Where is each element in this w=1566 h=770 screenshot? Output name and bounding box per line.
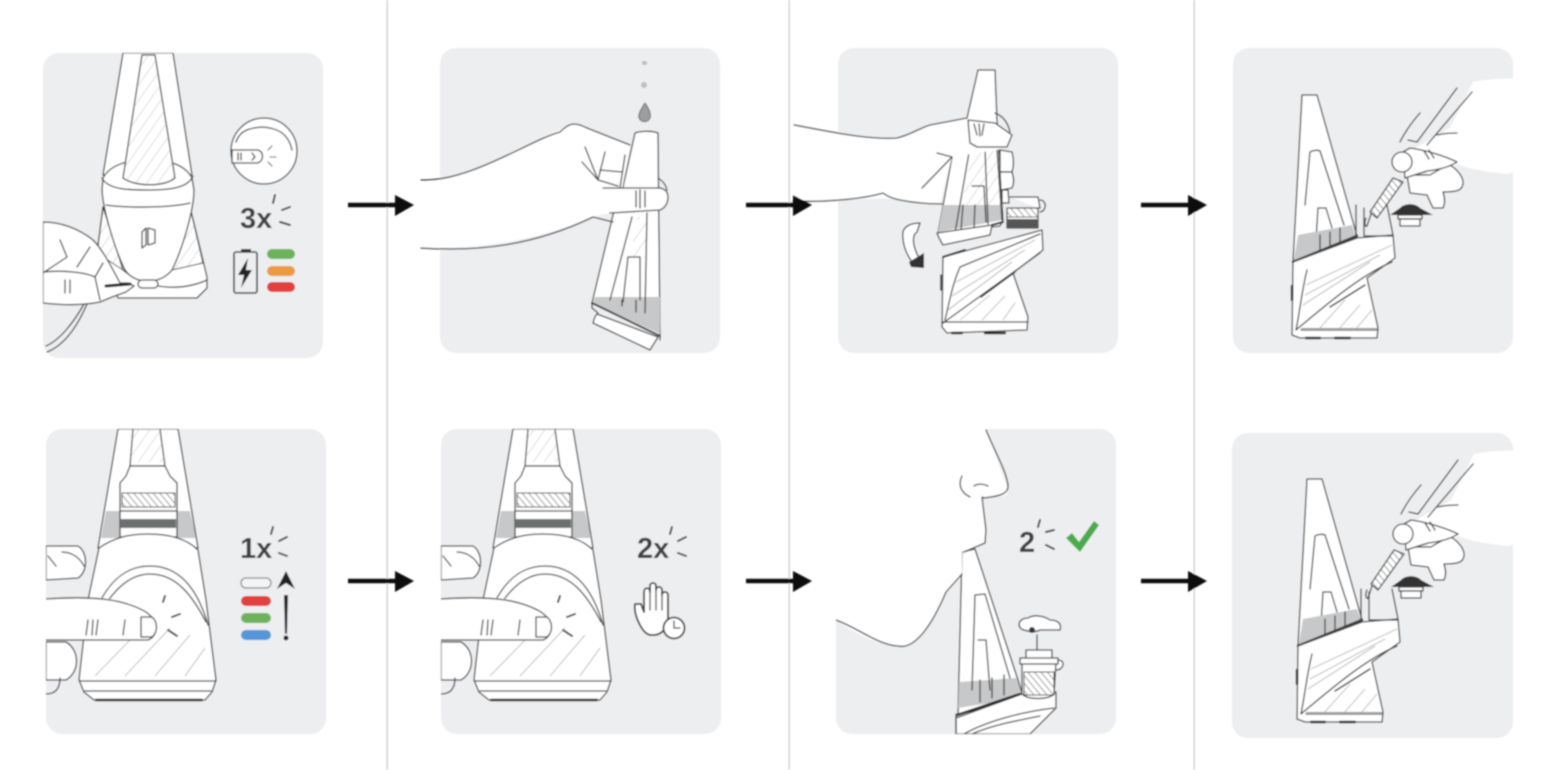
heat level bars [241,578,271,640]
base with bowl [941,197,1045,333]
device at mouth [956,549,1063,734]
device front with finger [441,429,611,700]
panel 7: inhale [836,429,1116,734]
icon: rotate arrows [903,223,924,268]
panel 2: fill with water [421,48,720,353]
icon: check mark [1066,521,1099,552]
chamber with cap [1019,616,1063,698]
count: 3x: 3x [240,203,272,235]
arrow [746,195,812,216]
count: 3x [240,195,290,235]
battery level bars [267,249,295,292]
count: 2: 2 [1019,527,1035,559]
panel 3: attach chamber [793,48,1118,353]
count: 2x [637,527,686,565]
bowl on base [1007,197,1045,228]
panel 4: load with tool [1233,48,1530,353]
icon: temperature arrow [277,571,295,640]
count: 2x: 2x [637,533,669,565]
panel 6: press button twice, wait [441,429,721,734]
water drops [639,61,650,122]
hand holding chamber [793,113,1014,204]
count: 1x: 1x [240,533,272,565]
arrow [348,195,414,216]
count: 2 [1019,520,1054,559]
arrow [746,571,812,592]
panel 8: clean with tool [1232,433,1531,738]
face profile [836,429,1008,646]
panel 5: press button once [46,429,326,734]
panel dividers [386,0,1195,770]
hand with loading tool [1365,79,1530,226]
device side view [1292,95,1395,338]
tilted chamber [592,131,660,350]
arrow [348,571,414,592]
panel 1: charge the base [43,53,323,358]
hand holding chamber [421,124,668,249]
arrow [1141,571,1207,592]
icon: battery [234,249,257,293]
chamber held above base [937,70,1003,245]
device side view [1297,479,1400,722]
arrow [1141,195,1207,216]
hand with tool [1366,451,1531,598]
device base with USB port [43,53,207,352]
count: 1x [240,527,287,565]
device front with finger [46,429,216,700]
icon: hand and clock [635,583,684,638]
icon: button inset [231,118,297,184]
